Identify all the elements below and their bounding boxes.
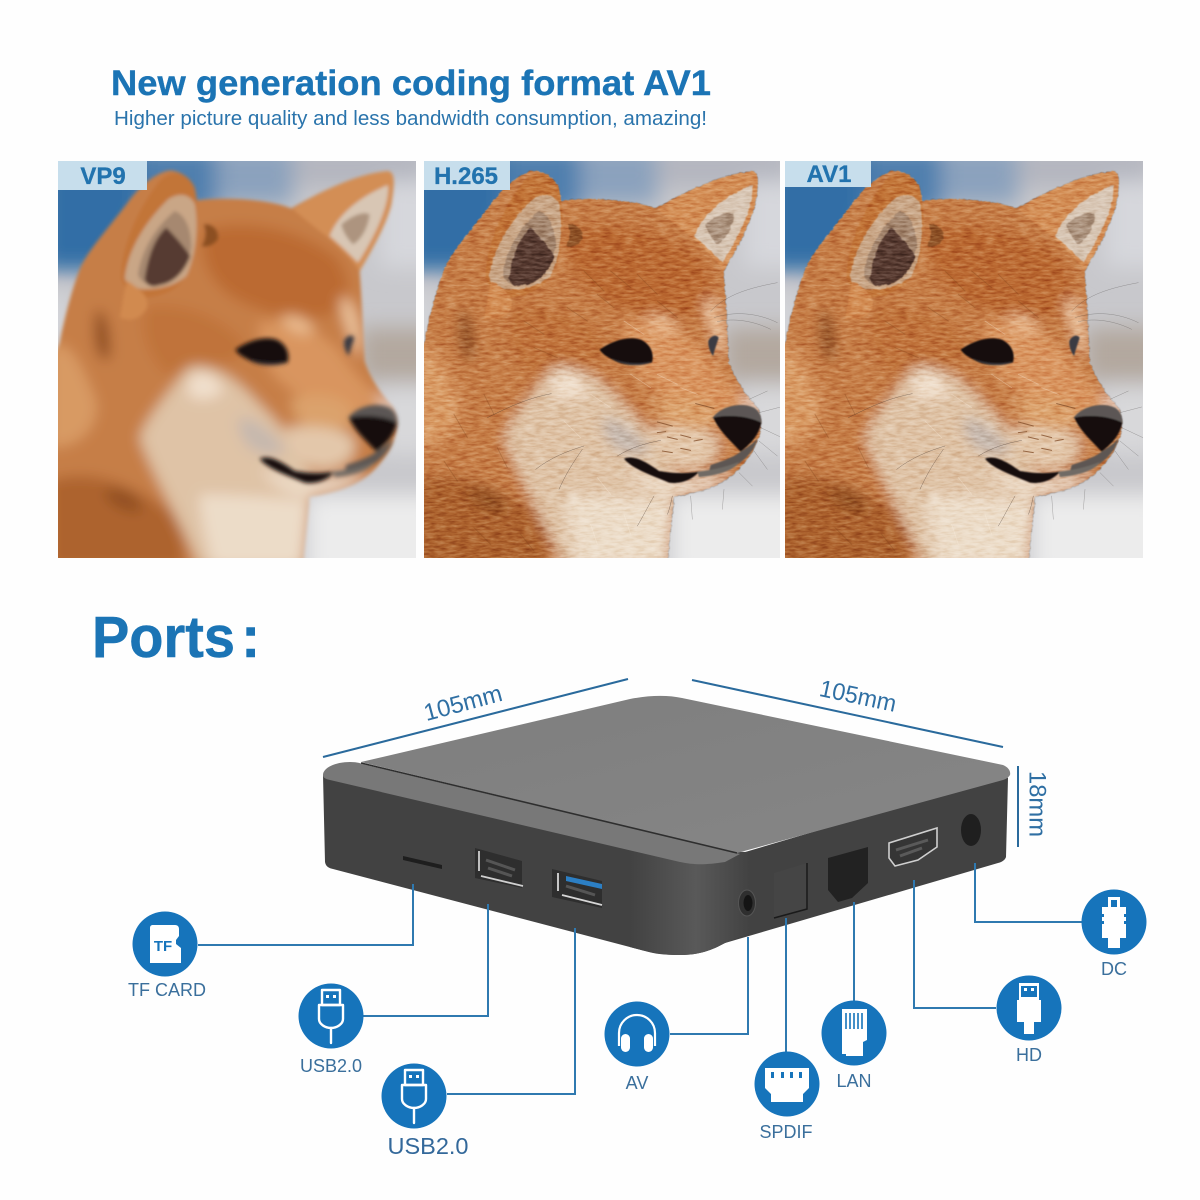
front corner highlight (630, 850, 750, 955)
icon: TF card: TF (154, 938, 172, 955)
label: TF CARD: TF CARD (128, 980, 206, 1000)
port: HDMI (889, 828, 937, 866)
subtitle: Higher picture quality and less bandwidth consumption, amazing! (114, 107, 707, 130)
icon: DC plug (1082, 890, 1146, 954)
leader line: DC (975, 863, 1082, 922)
label: DC: DC (1101, 959, 1127, 979)
dimension: height 18mm: 18mm (1024, 771, 1050, 837)
port: DC jack (961, 814, 981, 846)
icon: SPDIF connector (754, 1052, 820, 1116)
heading: Ports: Ports (92, 605, 235, 670)
label: HD: HD (1016, 1045, 1042, 1065)
dimension: width 105mm left: 105mm (421, 680, 505, 727)
panel: VP9 comparison photo (58, 161, 416, 558)
label: AV: AV (626, 1073, 648, 1093)
port: USB 2.0 (475, 848, 523, 888)
icon: USB2.0 second (382, 1064, 446, 1128)
title: New generation coding format AV1 (111, 63, 711, 103)
device body sides (323, 775, 1008, 955)
label: SPDIF: SPDIF (759, 1122, 813, 1142)
leader line: TF card (198, 884, 413, 945)
icon: USB2.0 first (298, 984, 364, 1048)
icon: LAN plug (822, 1000, 886, 1066)
icon: TF card (132, 912, 198, 976)
panel: AV1 comparison photo (785, 161, 1143, 558)
port: SPDIF (774, 863, 807, 918)
heading: Ports: : (241, 605, 260, 670)
leader line: LAN (853, 902, 855, 1002)
groove line (361, 763, 737, 853)
port: USB 3.0 (552, 869, 602, 908)
leader line: AV (670, 937, 748, 1034)
dimension: depth 105mm right: 105mm (817, 675, 899, 718)
leader line: USB2.0 second (447, 928, 575, 1094)
panel: AV1 comparison photo: AV1 (807, 161, 851, 188)
front strip of the top cover (323, 762, 740, 864)
panel: H.265 comparison photo (424, 161, 780, 558)
dimension: depth 105mm right (692, 675, 1003, 747)
panel: H.265 comparison photo: H.265 (434, 163, 498, 190)
lighter main top face (361, 696, 1010, 853)
label: USB2.0 second: USB2.0 (388, 1133, 468, 1159)
port: LAN (828, 847, 868, 902)
dimension: height 18mm (1018, 766, 1050, 847)
port: AV jack (738, 890, 756, 916)
leader line: USB2.0 first (363, 904, 488, 1016)
leader line: HD (914, 880, 996, 1008)
label: LAN: LAN (836, 1071, 872, 1091)
port: TF slot (403, 856, 442, 869)
device: TV box (323, 696, 1010, 955)
icon: AV headphones (604, 1002, 670, 1066)
leader line: SPDIF (785, 918, 787, 1052)
dimension: width 105mm left (323, 679, 628, 757)
panel: VP9 comparison photo: VP9 (80, 163, 126, 190)
label: USB2.0 first: USB2.0 (300, 1056, 362, 1076)
icon: HD plug (996, 976, 1062, 1040)
